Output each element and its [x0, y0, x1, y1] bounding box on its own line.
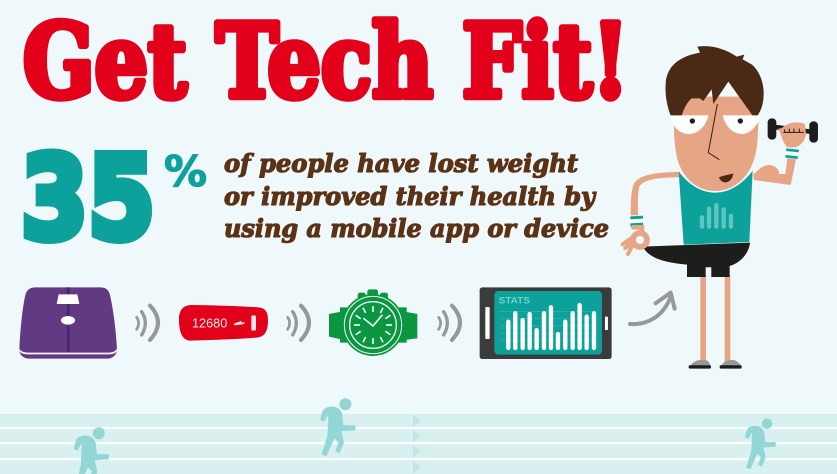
left arm [631, 172, 679, 227]
shorts [643, 243, 750, 277]
eyes [669, 115, 761, 134]
icon: smart scale [19, 287, 117, 359]
legs [700, 275, 730, 362]
arrow [630, 293, 675, 324]
shoes [689, 360, 742, 369]
dumbbell [768, 118, 818, 143]
right hand [778, 122, 806, 147]
title: Get Tech Fit! [23, 2, 629, 122]
icon: wireless signal 3 [439, 306, 460, 340]
runner left [74, 427, 109, 474]
description text: using a mobile app or device [224, 214, 609, 243]
mouth [719, 173, 733, 182]
description text: of people have lost weight [224, 149, 579, 178]
left hand [623, 227, 647, 254]
running track [0, 414, 837, 474]
icon: red activity tracker: 12680 [192, 317, 227, 331]
description text: or improved their health by [224, 182, 597, 211]
face [674, 97, 758, 191]
description text [224, 149, 609, 243]
runner right [745, 418, 776, 469]
icon: red activity tracker [179, 305, 268, 341]
character: fitness man [623, 46, 818, 369]
icon: wireless signal 1 [137, 306, 158, 340]
runner middle [320, 398, 355, 456]
icon: phone with stats: STATS [499, 295, 530, 305]
icon: green watch [329, 289, 417, 356]
vest [679, 171, 753, 245]
statistic: 35%: 35 [21, 132, 155, 265]
icon: phone with stats [480, 287, 612, 359]
statistic: 35%: % [164, 147, 207, 196]
hair [666, 46, 764, 116]
left wristband [630, 215, 643, 226]
icon: wireless signal 2 [288, 306, 309, 340]
right arm [753, 148, 799, 185]
nose [708, 104, 719, 160]
